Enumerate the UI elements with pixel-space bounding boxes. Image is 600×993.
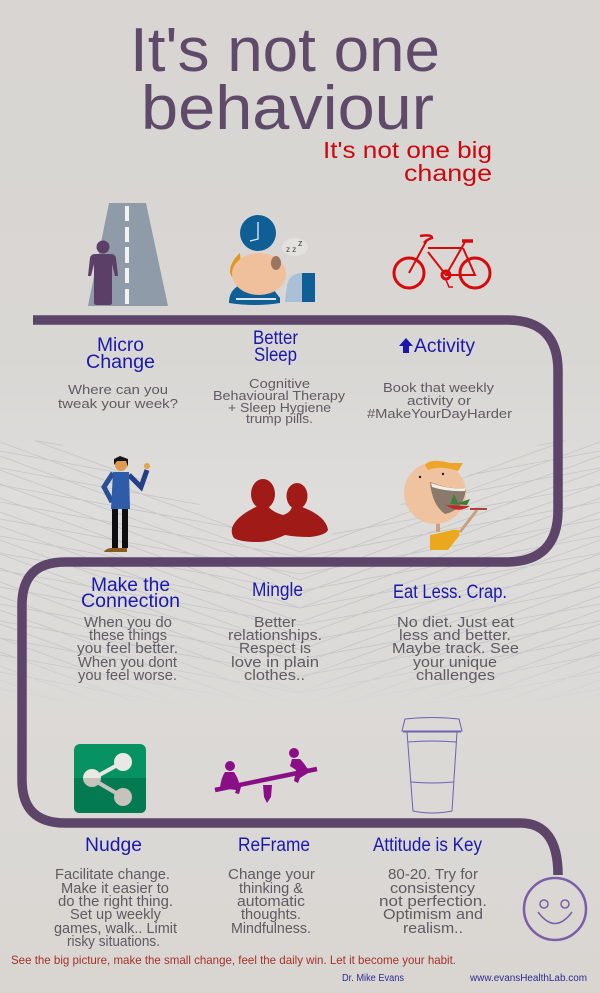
icon: seesaw <box>215 748 317 803</box>
panel: eat less crap <box>392 582 519 684</box>
icon: man waving <box>104 456 150 552</box>
author: Dr. Mike Evans <box>342 973 404 984</box>
heading: Better <box>253 328 299 349</box>
text: you feel worse. <box>78 668 177 684</box>
text <box>392 615 519 684</box>
text <box>213 376 346 426</box>
text: Behavioural Therapy <box>213 388 346 403</box>
text: trump pills. <box>246 411 313 426</box>
title <box>130 16 440 143</box>
panel: attitude is key <box>373 835 487 937</box>
text: Where can you <box>68 382 168 397</box>
text: your unique <box>413 655 497 671</box>
icon: coffee cup <box>402 718 462 813</box>
heading: Mingle <box>252 580 303 601</box>
icon: road with person <box>88 203 168 306</box>
icon: two people <box>232 479 328 542</box>
text: 80-20. Try for <box>388 867 478 883</box>
heading: Make the <box>91 575 170 596</box>
heading <box>86 335 155 373</box>
heading: ReFrame <box>238 835 310 856</box>
text: Set up weekly <box>70 907 162 923</box>
heading: Sleep <box>254 345 297 366</box>
text: relationships. <box>228 628 322 644</box>
heading <box>253 328 299 366</box>
subtitle: change <box>404 160 492 186</box>
text <box>367 380 513 421</box>
text: consistency <box>390 881 476 897</box>
panel: make the connection <box>77 575 180 684</box>
text: games, walk.. Limit <box>54 921 177 937</box>
heading: Change <box>86 352 155 373</box>
heading: Nudge <box>85 835 142 856</box>
heading: Eat Less. Crap. <box>393 582 507 603</box>
text <box>228 867 315 937</box>
icon: sleeping head with clock: z <box>298 238 303 248</box>
text: Cognitive <box>249 376 310 391</box>
text <box>54 867 177 950</box>
text <box>228 615 322 684</box>
text: Change your <box>228 867 315 883</box>
text: thinking & <box>239 881 303 897</box>
text: Facilitate change. <box>55 867 170 883</box>
text: When you dont <box>78 655 177 671</box>
panel: better sleep <box>213 328 346 426</box>
heading <box>81 575 180 612</box>
text: Mindfulness. <box>231 921 311 937</box>
icon: person eating <box>404 461 487 550</box>
text: Book that weekly <box>383 380 495 395</box>
icon: bicycle <box>394 235 490 288</box>
icon: sleeping head with clock <box>229 215 315 305</box>
closing message: See the big picture, make the small change, feel the daily win. Let it become your habit. <box>11 953 456 967</box>
text: activity or <box>407 393 472 408</box>
text <box>379 867 487 937</box>
panel: activity <box>367 336 513 421</box>
text: do the right thing. <box>58 894 173 910</box>
icon: sleeping head with clock: z z <box>286 245 296 254</box>
heading: Micro <box>97 335 144 356</box>
text: risky situations. <box>67 934 160 950</box>
text: Respect is <box>239 641 311 657</box>
winding path <box>22 320 558 875</box>
text: less and better. <box>399 628 511 644</box>
icon: smiley <box>524 878 586 940</box>
text: automatic <box>237 894 305 910</box>
text: clothes.. <box>244 668 305 684</box>
panel: micro change <box>58 335 178 411</box>
subtitle: It's not one big <box>323 137 492 163</box>
text: Better <box>254 615 296 631</box>
heading: Attitude is Key <box>373 835 482 856</box>
text: No diet. Just eat <box>397 615 514 631</box>
text: thoughts. <box>241 907 301 923</box>
text: + Sleep Hygiene <box>228 400 331 415</box>
text <box>77 615 178 684</box>
text: realism.. <box>403 921 463 937</box>
title: It's not one <box>130 16 440 85</box>
panel: reframe <box>228 835 315 937</box>
icon: up arrow <box>399 338 413 353</box>
text: challenges <box>416 668 495 684</box>
text: not perfection. <box>379 894 487 910</box>
text: #MakeYourDayHarder <box>367 406 513 421</box>
heading: Activity <box>414 336 475 357</box>
panel: nudge <box>54 835 177 950</box>
text <box>58 382 178 411</box>
website: www.evansHealthLab.com <box>469 973 587 984</box>
panel: mingle <box>228 580 322 684</box>
text: When you do <box>84 615 172 631</box>
text: Optimism and <box>383 907 483 923</box>
text: Maybe track. See <box>392 641 519 657</box>
icon: green share button <box>74 744 146 813</box>
heading: Connection <box>81 591 180 612</box>
subtitle <box>323 137 492 186</box>
text: Make it easier to <box>61 881 169 897</box>
text: you feel better. <box>77 641 178 657</box>
text: these things <box>89 628 167 644</box>
text: tweak your week? <box>58 396 178 411</box>
text: love in plain <box>231 655 319 671</box>
title: behaviour <box>141 74 434 143</box>
